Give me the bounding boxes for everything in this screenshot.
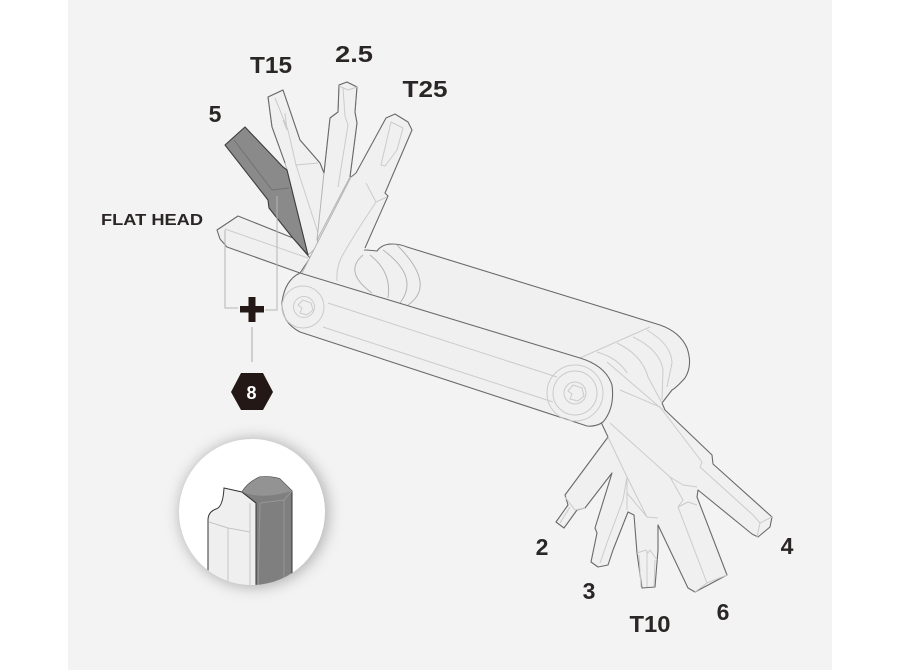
torx bit T25 and handle bbox=[300, 114, 412, 300]
label: 6: 6 bbox=[717, 599, 729, 625]
front plate with hex bolts bbox=[282, 273, 613, 426]
label: T25: T25 bbox=[402, 76, 448, 102]
label: 4: 4 bbox=[781, 533, 794, 559]
label: T10: T10 bbox=[630, 611, 670, 637]
label: T15: T15 bbox=[250, 52, 292, 78]
tool 2 details bbox=[560, 497, 585, 523]
hexagon badge: 8 functions bbox=[231, 373, 273, 410]
label: 2.5: 2.5 bbox=[335, 41, 373, 67]
bolt: left hinge bbox=[282, 286, 324, 328]
inset: flat blade bbox=[208, 488, 256, 590]
bolt: right hinge bbox=[547, 365, 603, 421]
tool 6 details bbox=[608, 423, 727, 592]
tool 3 details bbox=[600, 477, 627, 563]
tool T10 details bbox=[627, 493, 658, 587]
hexagon badge: 8 functions: 8 bbox=[246, 383, 257, 403]
label: flat head: FLAT HEAD bbox=[101, 212, 203, 229]
inset: dark hex bit bbox=[244, 491, 292, 585]
hex bit 2.5 bbox=[317, 82, 357, 240]
torx bit T15 bbox=[268, 90, 324, 255]
plus symbol bbox=[240, 306, 264, 312]
hex bit 5 (highlighted) bbox=[225, 127, 308, 255]
bracket linking flat head and hex 5 to plus bbox=[225, 196, 277, 310]
connector line bbox=[251, 327, 253, 362]
plus symbol vertical bbox=[248, 297, 256, 322]
tool 4 details bbox=[607, 362, 772, 537]
label: 3: 3 bbox=[583, 578, 595, 604]
flat head bit bbox=[217, 216, 310, 273]
tool body: rear plate and rollers bbox=[340, 244, 690, 420]
roller arcs at top hinge bbox=[355, 245, 420, 305]
inset detail circle bbox=[179, 438, 329, 590]
label: 5: 5 bbox=[209, 101, 222, 127]
lower tool fan silhouette: tools 2, 3, T10, 6, 4 bbox=[556, 362, 772, 592]
label: 2: 2 bbox=[536, 534, 548, 560]
